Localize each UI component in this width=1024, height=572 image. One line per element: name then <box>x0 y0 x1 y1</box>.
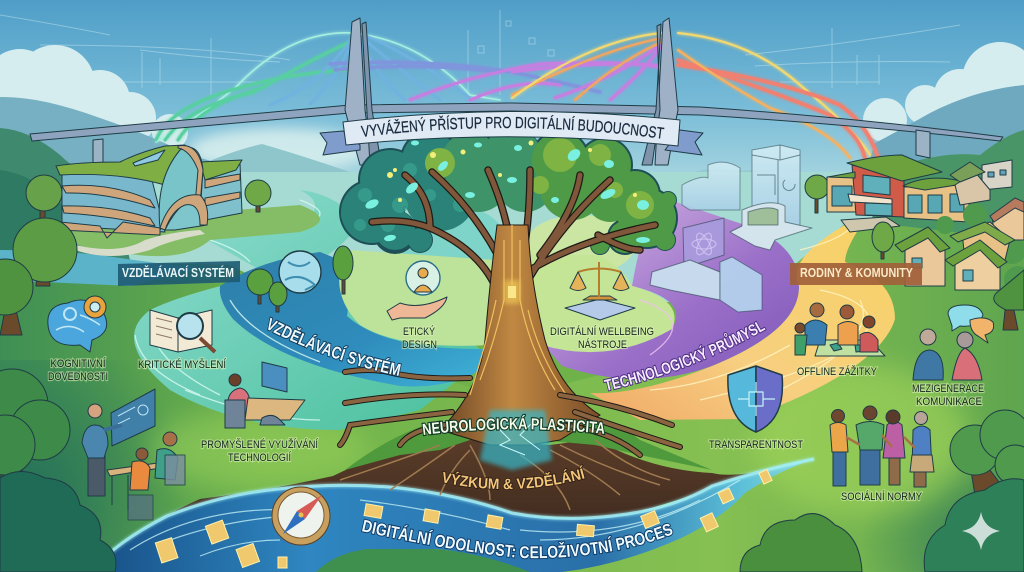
label: mezigenerace komunikace <box>912 383 984 408</box>
steps <box>841 217 900 232</box>
glass tower <box>752 145 800 226</box>
bush bottom centre <box>740 514 862 572</box>
icon: hand holding person <box>387 261 447 320</box>
panel: village houses <box>895 160 1024 290</box>
big trees right <box>924 270 1024 572</box>
arch platform <box>730 203 812 250</box>
ribbon tail right <box>665 130 703 155</box>
glowing leaves <box>364 140 650 243</box>
heading: výzkum a vzdělání: VÝZKUM & VZDĚLÁNÍ <box>442 464 586 490</box>
pale valley ground behind tree <box>90 172 870 302</box>
yellow stream <box>590 225 895 420</box>
label: sociální normy: SOCIÁLNÍ NORMY <box>841 490 923 503</box>
icon: speech bubbles <box>948 305 994 343</box>
tree below village <box>872 222 894 259</box>
panel: community center <box>805 155 969 232</box>
yellow flow lines <box>640 228 870 400</box>
label: etický design: ETICKÝ <box>403 325 436 338</box>
student green <box>155 432 185 485</box>
icon: brain with gears <box>48 296 107 352</box>
red main block <box>852 165 904 217</box>
canopy shadow outline <box>339 128 678 255</box>
student orange <box>128 448 153 520</box>
left stream blue swoosh <box>220 252 490 387</box>
soil roots <box>340 440 670 510</box>
lawn path <box>75 230 205 256</box>
label: rodiny a komunity pill: RODINY & KOMUNITY <box>800 265 913 280</box>
digital data marks in sky <box>0 10 960 95</box>
label: kritické myšlení: KRITICKÉ MYŠLENÍ <box>138 358 227 371</box>
teacher <box>82 404 122 496</box>
roots <box>340 370 680 455</box>
building lawn <box>60 205 320 256</box>
low haze clouds <box>190 128 370 172</box>
icon: girl at computer <box>225 362 305 428</box>
label: offline zážitky: OFFLINE ZÁŽITKY <box>797 365 878 378</box>
icon: older couple talking <box>913 329 982 380</box>
label: vzdělávací systém pill <box>118 261 240 286</box>
label: digitální wellbeing nástroje: DIGITÁLNÍ WELLBEING <box>550 325 654 338</box>
digital resilience river <box>90 459 814 572</box>
stream flow lines <box>135 200 320 420</box>
icon: compass <box>272 487 330 545</box>
heading: digitální odolnost: DIGITÁLNÍ ODOLNOST: CELOŽIVOTNÍ PROCES <box>361 518 674 560</box>
label: mezigenerace komunikace: KOMUNIKACE <box>916 396 982 408</box>
panel: eco school building <box>56 145 242 238</box>
label: digitální wellbeing nástroje <box>550 325 654 351</box>
river bright top edge <box>95 459 814 567</box>
label: etický design: DESIGN <box>402 339 437 351</box>
purple cube <box>683 218 724 268</box>
building glass body <box>62 170 165 232</box>
soil <box>90 436 812 572</box>
tree by left wing <box>805 175 829 213</box>
neuro glow <box>480 410 552 470</box>
label: etický design <box>402 325 437 351</box>
heading: neurologická plasticita: NEUROLOGICKÁ PLASTICITA <box>422 414 606 436</box>
trunk <box>440 225 600 445</box>
building central arch <box>159 148 203 230</box>
icon: family board game <box>795 303 885 356</box>
ribbon body <box>343 111 680 146</box>
bridge towers <box>345 18 678 168</box>
clouds right <box>863 42 1024 142</box>
ribbon tail left <box>320 131 360 155</box>
grass bank by tree <box>345 420 712 470</box>
heading: technologický průmysl on stream: TECHNOLOGICKÝ PRŮMYSL <box>602 320 767 392</box>
title banner <box>320 111 704 156</box>
branches <box>372 170 655 290</box>
canopy leaves <box>341 132 476 252</box>
left forest hills <box>0 128 130 270</box>
bridge cables <box>156 33 878 158</box>
glowing chip <box>504 280 520 304</box>
icon: shield <box>728 366 782 432</box>
label: rodiny a komunity pill <box>790 263 922 285</box>
trees upper left <box>0 175 353 335</box>
watermark star <box>962 512 1000 550</box>
label: digitální wellbeing nástroje: NÁSTROJE <box>578 338 627 351</box>
building floors <box>60 185 160 238</box>
panel: tree <box>339 128 680 510</box>
label: kognitivní dovednosti: KOGNITIVNÍ <box>50 357 106 370</box>
label: kognitivní dovednosti <box>48 357 108 383</box>
lower slab <box>650 260 720 300</box>
label: mezigenerace komunikace: MEZIGENERACE <box>912 383 984 395</box>
label: kognitivní dovednosti: DOVEDNOSTI <box>48 371 108 383</box>
river flow lines <box>130 480 740 556</box>
building green roof <box>56 145 190 185</box>
desk <box>107 462 167 510</box>
smart board <box>111 389 155 446</box>
house one <box>905 232 945 286</box>
circuit lines on trunk <box>470 225 570 400</box>
house four <box>962 222 1010 260</box>
icon: globe <box>279 251 321 293</box>
icon: scales on plate <box>565 262 635 320</box>
glass cylinders <box>682 162 740 210</box>
atom icon <box>692 231 716 257</box>
mountains <box>0 85 1024 215</box>
right forest hills <box>860 130 1024 290</box>
sky background <box>0 0 1024 240</box>
banner title: VYVÁŽENÝ PŘÍSTUP PRO DIGITÁLNÍ BUDOUCNOST <box>360 115 664 139</box>
ground shading <box>0 360 1024 572</box>
inner green island right <box>530 255 675 352</box>
house three <box>992 200 1024 240</box>
tree near globe <box>247 269 273 304</box>
icon: envelopes in river <box>155 469 772 568</box>
building entry <box>165 201 207 230</box>
distant apartment houses <box>982 160 1012 190</box>
label: promyšlené využívání technologií: TECHNOLOGIÍ <box>228 451 292 464</box>
big trees left <box>0 369 116 572</box>
green bank under river <box>316 549 530 572</box>
clouds left <box>0 45 188 150</box>
village bushes <box>936 203 1024 294</box>
arch opening <box>748 208 778 225</box>
pale glow under canopy <box>395 205 635 275</box>
green roofs <box>847 155 942 181</box>
purple stream <box>542 195 799 379</box>
panel: tech glass buildings <box>650 145 812 312</box>
left stream teal <box>134 190 480 430</box>
left lake <box>0 250 200 286</box>
label: vzdělávací systém pill: VZDĚLÁVACÍ SYSTÉM <box>122 265 234 280</box>
glass shield block <box>720 257 762 312</box>
right wing <box>904 185 969 222</box>
grass ground <box>0 220 1024 572</box>
label: promyšlené využívání technologií <box>201 438 319 464</box>
icon: open book with magnifier <box>150 310 215 352</box>
canopy highlights <box>425 138 654 219</box>
icon: teacher and students <box>82 389 185 520</box>
house two <box>955 244 1000 290</box>
inner green island left <box>339 250 495 346</box>
label: transparentnost: TRANSPARENTNOST <box>709 439 803 451</box>
bridge deck <box>30 103 1003 168</box>
icon: people holding hands <box>830 406 934 487</box>
label: promyšlené využívání technologií: PROMYŠLENÉ VYUŽÍVÁNÍ <box>201 438 319 451</box>
left wing <box>827 175 856 212</box>
heading: vzdělávací systém on stream: VZDĚLÁVACÍ SYSTÉM <box>267 316 402 377</box>
